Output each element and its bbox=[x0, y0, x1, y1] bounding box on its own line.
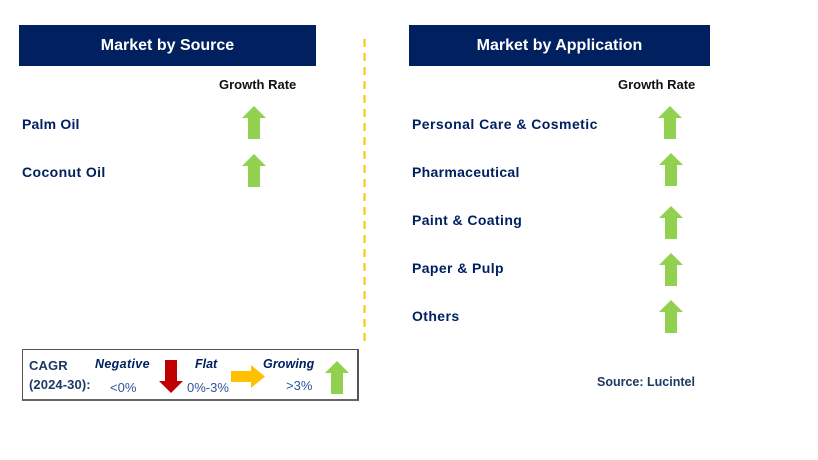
icon: red down arrow bbox=[159, 360, 183, 393]
legend: growing label: Growing bbox=[263, 357, 314, 371]
heading: market by application bbox=[409, 25, 710, 66]
label: palm oil: Palm Oil bbox=[22, 116, 80, 132]
legend title bbox=[29, 358, 91, 392]
icon: paint and coating growth arrow bbox=[659, 206, 683, 239]
icon: green up arrow bbox=[325, 361, 349, 394]
icon: amber right arrow bbox=[231, 365, 265, 388]
label: pharmaceutical: Pharmaceutical bbox=[412, 164, 520, 180]
legend: negative range: <0% bbox=[110, 380, 136, 395]
icon: coconut oil growth arrow bbox=[242, 154, 266, 187]
label: personal care and cosmetic: Personal Care & Cosmetic bbox=[412, 116, 598, 132]
label: others: Others bbox=[412, 308, 460, 324]
column label: growth rate, application: Growth Rate bbox=[618, 77, 695, 92]
legend: negative label: Negative bbox=[95, 357, 150, 371]
heading: market by application: Market by Application bbox=[477, 37, 642, 54]
legend: flat label: Flat bbox=[195, 357, 217, 371]
legend: flat range: 0%-3% bbox=[187, 380, 229, 395]
legend: CAGR 2024-30 bbox=[22, 349, 359, 401]
legend title: (2024-30): bbox=[29, 377, 91, 392]
heading: market by source bbox=[19, 25, 316, 66]
icon: palm oil growth arrow bbox=[242, 106, 266, 139]
column label: growth rate, source: Growth Rate bbox=[219, 77, 296, 92]
legend: growing range: >3% bbox=[286, 378, 312, 393]
heading: market by source: Market by Source bbox=[101, 37, 234, 54]
icon: others growth arrow bbox=[659, 300, 683, 333]
source note: Source: Lucintel bbox=[597, 375, 695, 389]
icon: pharmaceutical growth arrow bbox=[659, 153, 683, 186]
icon: paper and pulp growth arrow bbox=[659, 253, 683, 286]
icon: personal care growth arrow bbox=[658, 106, 682, 139]
label: paint and coating: Paint & Coating bbox=[412, 212, 522, 228]
label: coconut oil: Coconut Oil bbox=[22, 164, 106, 180]
label: paper and pulp: Paper & Pulp bbox=[412, 260, 504, 276]
legend title: CAGR bbox=[29, 358, 68, 373]
